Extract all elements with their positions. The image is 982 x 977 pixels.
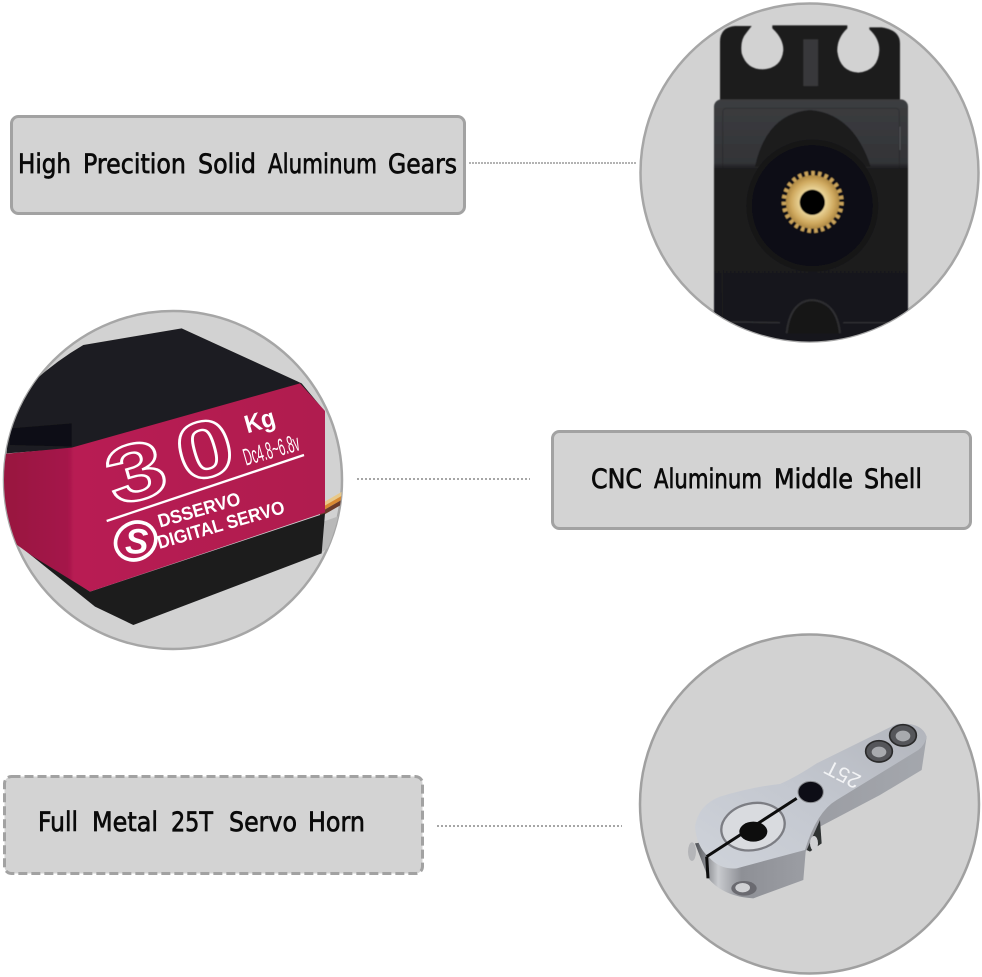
label box: High Precition Solid Aluminum Gears: Solid: [198, 149, 256, 180]
label box: CNC Aluminum Middle Shell: Middle: [774, 464, 853, 495]
servo marking: 30 Kg rating: 0: [165, 399, 244, 500]
label box: Full Metal 25T Servo Horn: Metal: [92, 807, 158, 838]
servo marking: 30 Kg rating: DIGITAL SERVO: [155, 496, 287, 553]
label box: High Precition Solid Aluminum Gears: Aluminum: [268, 149, 377, 180]
icon: servo body: [714, 99, 908, 353]
icon: horn top face: [695, 724, 927, 869]
label box: High Precition Solid Aluminum Gears: Gears: [388, 149, 457, 180]
connector: gears label to gear circle: [469, 162, 637, 164]
icon: servo black top case: [7, 328, 325, 453]
icon: horn side faces: [695, 737, 927, 898]
horn marking: 25T: 25T: [821, 755, 865, 793]
label box: CNC Aluminum Middle Shell: Aluminum: [654, 464, 762, 495]
servo marking: 30 Kg rating: 3: [95, 421, 176, 523]
label box: Full Metal 25T Servo Horn: Servo: [229, 807, 297, 838]
label box: Full Metal 25T Servo Horn: [4, 776, 422, 874]
servo marking: 30 Kg rating: S: [125, 522, 148, 561]
label box: High Precition Solid Aluminum Gears: [12, 116, 464, 214]
label box: Full Metal 25T Servo Horn: 25T: [171, 807, 213, 838]
icon: horn holes: [798, 781, 823, 803]
servo marking: 30 Kg rating: DSSERVO: [155, 488, 243, 532]
connector: horn label to horn circle: [437, 825, 622, 827]
icon: servo wire: [320, 489, 347, 553]
connector: shell circle to shell label: [357, 478, 530, 480]
label box: Full Metal 25T Servo Horn: Horn: [308, 807, 365, 838]
servo marking: 30 Kg rating: [106, 412, 304, 562]
image circle: CNC aluminum middle shell close-up: [3, 311, 347, 649]
image circle: servo gear close-up: [640, 4, 978, 353]
label box: CNC Aluminum Middle Shell: Shell: [864, 464, 922, 495]
icon: servo black bottom case: [10, 513, 325, 625]
icon: horn clamp screws: [731, 881, 757, 896]
label box: High Precition Solid Aluminum Gears: Precition: [83, 149, 186, 180]
label box: CNC Aluminum Middle Shell: [552, 432, 970, 528]
icon: servo mounting plate: [720, 25, 900, 100]
icon: horn clamp bore: [717, 797, 789, 856]
label box: Full Metal 25T Servo Horn: Full: [38, 807, 78, 838]
icon: brass output gear: [784, 174, 841, 230]
servo marking: 30 Kg rating: Dc4.8~6.8v: [240, 430, 303, 471]
label box: High Precition Solid Aluminum Gears: High: [18, 149, 71, 180]
icon: servo red aluminum shell: [3, 383, 325, 592]
image circle: 25T servo horn: [640, 634, 979, 974]
servo marking: 30 Kg rating: Kg: [241, 404, 278, 439]
label box: CNC Aluminum Middle Shell: CNC: [591, 464, 642, 495]
